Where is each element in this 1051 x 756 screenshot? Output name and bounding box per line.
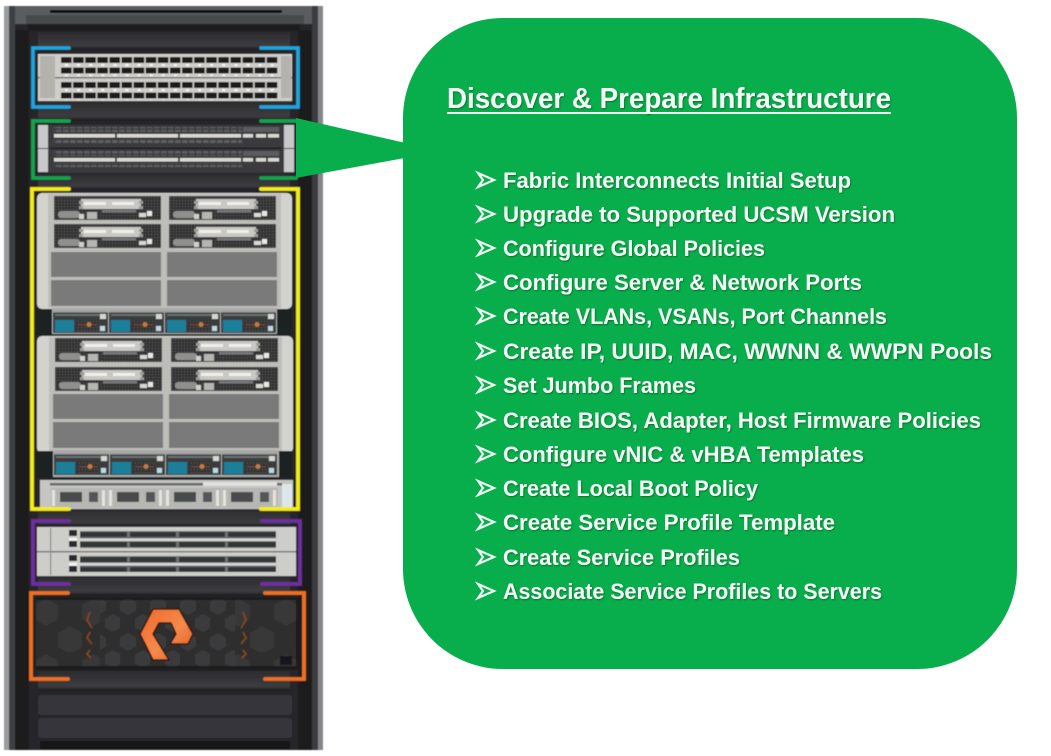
- device: Pure Storage array: [35, 597, 298, 670]
- device: blue switch pair: [38, 54, 292, 101]
- list item 9: Configure vNIC & vHBA Templates: [503, 442, 864, 467]
- bracket: green: [33, 121, 296, 178]
- bracket: blue: [33, 48, 298, 107]
- list item 8: Create BIOS, Adapter, Host Firmware Policies: [503, 408, 981, 433]
- list item 6: Create IP, UUID, MAC, WWNN & WWPN Pools: [503, 339, 992, 364]
- device: UCS chassis 2: [37, 336, 293, 453]
- callout pointer: [296, 118, 410, 178]
- heading: Discover & Prepare Infrastructure: [447, 83, 891, 115]
- list item 5: Create VLANs, VSANs, Port Channels: [503, 304, 887, 329]
- device: UCS chassis 1: [37, 193, 292, 309]
- device: UCS IO modules 1: [36, 308, 292, 335]
- icon: Pure Storage logo: [140, 609, 193, 660]
- bracket: yellow: [32, 189, 298, 509]
- list item 3: Configure Global Policies: [503, 236, 765, 261]
- panel: green callout: [296, 18, 1017, 669]
- device: UCS IO modules 2: [36, 450, 292, 478]
- rack illustration: [4, 6, 323, 750]
- checklist: [478, 168, 992, 604]
- list item 4: Configure Server & Network Ports: [503, 270, 862, 295]
- device: purple switch pair: [37, 527, 296, 576]
- bracket: orange: [31, 593, 304, 679]
- list item 2: Upgrade to Supported UCSM Version: [503, 202, 895, 227]
- list item 1: Fabric Interconnects Initial Setup: [503, 168, 851, 193]
- device: rack server: [40, 480, 293, 509]
- list item 11: Create Service Profile Template: [503, 510, 835, 535]
- list item 7: Set Jumbo Frames: [503, 373, 696, 398]
- device: green fabric interconnects: [38, 125, 295, 173]
- list item 13: Associate Service Profiles to Servers: [503, 579, 882, 604]
- bracket: purple: [33, 521, 300, 584]
- list item 10: Create Local Boot Policy: [503, 476, 759, 501]
- list item 12: Create Service Profiles: [503, 545, 740, 570]
- rack frame: [4, 6, 323, 750]
